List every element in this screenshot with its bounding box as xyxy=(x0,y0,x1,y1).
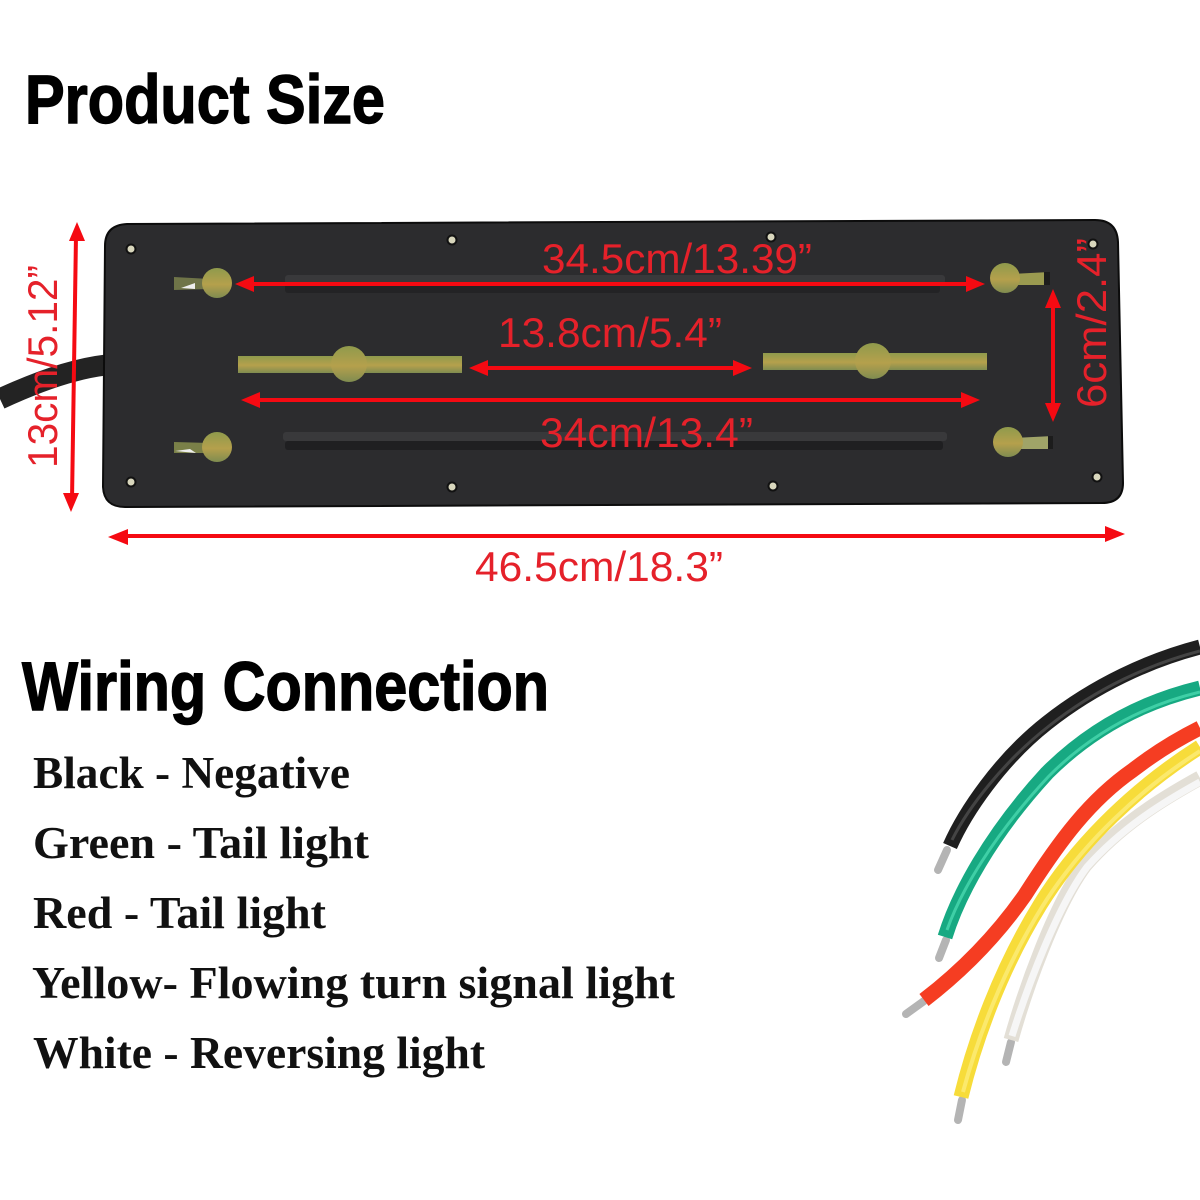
slot: centre right xyxy=(763,343,987,379)
wire: yellow: Yellow- Flowing turn signal light xyxy=(32,958,675,1008)
heading: Product Size: Product Size xyxy=(25,61,385,138)
arrow: 13cm height xyxy=(63,222,85,512)
white wire xyxy=(1011,778,1200,1040)
green wire xyxy=(945,688,1200,937)
slot: centre left xyxy=(238,346,462,382)
arrow: 6cm spacing xyxy=(1045,289,1061,422)
label: 13.8cm: 13.8cm/5.4” xyxy=(498,309,722,356)
arrow: 34.5cm xyxy=(235,276,985,292)
keyhole: bottom right xyxy=(993,427,1053,457)
arrow: 46.5cm xyxy=(108,526,1125,545)
wire: green: Green - Tail light xyxy=(33,818,369,868)
screws xyxy=(126,232,1102,492)
label: 6cm: 6cm/2.4” xyxy=(1068,238,1115,408)
label: 34cm: 34cm/13.4” xyxy=(540,409,753,456)
heading: Wiring Connection: Wiring Connection xyxy=(22,648,549,725)
metal wire tips xyxy=(906,850,1011,1120)
wire: white: White - Reversing light xyxy=(33,1028,485,1078)
red wire xyxy=(924,728,1200,1000)
keyhole: top left xyxy=(174,268,232,298)
arrow: 13.8cm xyxy=(469,360,752,376)
wires photo xyxy=(906,647,1200,1120)
wire: black: Black - Negative xyxy=(33,748,350,798)
keyhole: bottom left xyxy=(174,432,232,462)
pressed rib: bottom xyxy=(283,432,947,450)
pressed rib: top xyxy=(285,275,945,293)
arrow: 34cm xyxy=(241,392,980,408)
black wire xyxy=(950,647,1200,846)
yellow wire xyxy=(961,747,1200,1097)
wire list xyxy=(32,748,675,1078)
keyhole: top right xyxy=(990,263,1050,293)
wire: red: Red - Tail light xyxy=(33,888,326,938)
label: 46.5cm: 46.5cm/18.3” xyxy=(475,543,723,590)
label: 13cm: 13cm/5.12” xyxy=(19,265,66,468)
cable leaving the plate xyxy=(0,365,106,399)
label: 34.5cm: 34.5cm/13.39” xyxy=(542,235,812,282)
panel: black mounting plate xyxy=(103,220,1123,507)
